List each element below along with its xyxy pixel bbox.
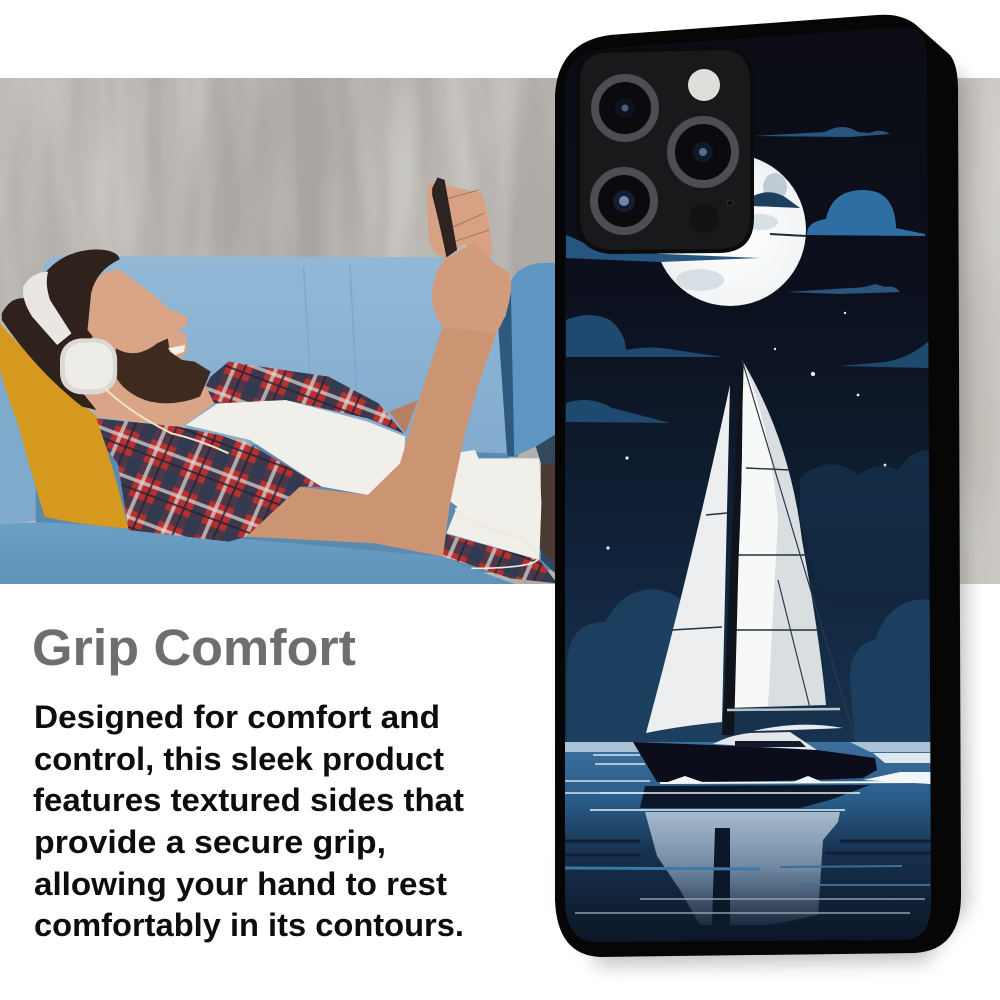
phone case <box>555 15 961 957</box>
teeth <box>168 345 185 355</box>
hull <box>633 742 877 782</box>
printed screen artwork <box>560 20 940 947</box>
forearm <box>246 327 496 557</box>
body text: features textured sides that <box>33 782 464 818</box>
panel: lifestyle photo <box>0 78 1000 585</box>
headphones <box>23 272 538 568</box>
hair <box>2 249 120 410</box>
cabin <box>713 732 817 750</box>
body text: Designed for comfort and <box>34 699 440 735</box>
sailboat <box>633 350 932 784</box>
white t-shirt <box>186 400 541 560</box>
night sky <box>560 20 940 745</box>
lens bottom <box>594 171 654 231</box>
phone drop shadow <box>565 40 968 966</box>
rigging <box>742 360 856 742</box>
plaid sleeve <box>96 418 321 542</box>
man on sofa, drawn at enlarged scale <box>0 177 557 585</box>
sea <box>560 742 940 947</box>
boom <box>727 709 840 710</box>
canopy <box>753 725 843 731</box>
sail seams <box>672 468 820 630</box>
case body <box>555 15 961 957</box>
body text: control, this sleek product <box>34 741 444 777</box>
plaid collar and shoulder <box>196 362 404 433</box>
main sail <box>728 360 826 708</box>
heading: Grip Comfort <box>32 619 356 676</box>
far clouds <box>567 450 935 742</box>
jib sail <box>646 385 730 733</box>
far arm <box>389 400 418 433</box>
water highlights <box>565 755 932 913</box>
lens right <box>671 120 735 184</box>
skin: face and neck <box>82 269 214 427</box>
body text: comfortably in its contours. <box>34 907 464 943</box>
jeans and belt <box>536 434 555 573</box>
mast <box>722 350 744 735</box>
boat reflection <box>645 812 840 925</box>
wake <box>665 772 932 784</box>
body text <box>33 699 464 943</box>
phone in hand <box>432 177 457 257</box>
microphone <box>727 200 733 206</box>
lens top <box>595 78 655 138</box>
camera island <box>578 48 752 252</box>
hand <box>427 182 511 333</box>
body text: provide a secure grip, <box>34 824 386 860</box>
flash <box>688 69 720 101</box>
sensor <box>689 203 719 233</box>
moon <box>654 154 806 306</box>
yellow pillow <box>0 323 129 529</box>
horizon glow <box>565 742 932 752</box>
concrete wall <box>0 78 1000 584</box>
stars <box>606 312 886 550</box>
sofa <box>0 256 557 585</box>
clouds <box>566 127 930 423</box>
beard <box>112 338 211 403</box>
body text: allowing your hand to rest <box>34 866 447 902</box>
reflection mast and hull <box>640 785 870 925</box>
plaid shirt hem <box>443 533 557 583</box>
